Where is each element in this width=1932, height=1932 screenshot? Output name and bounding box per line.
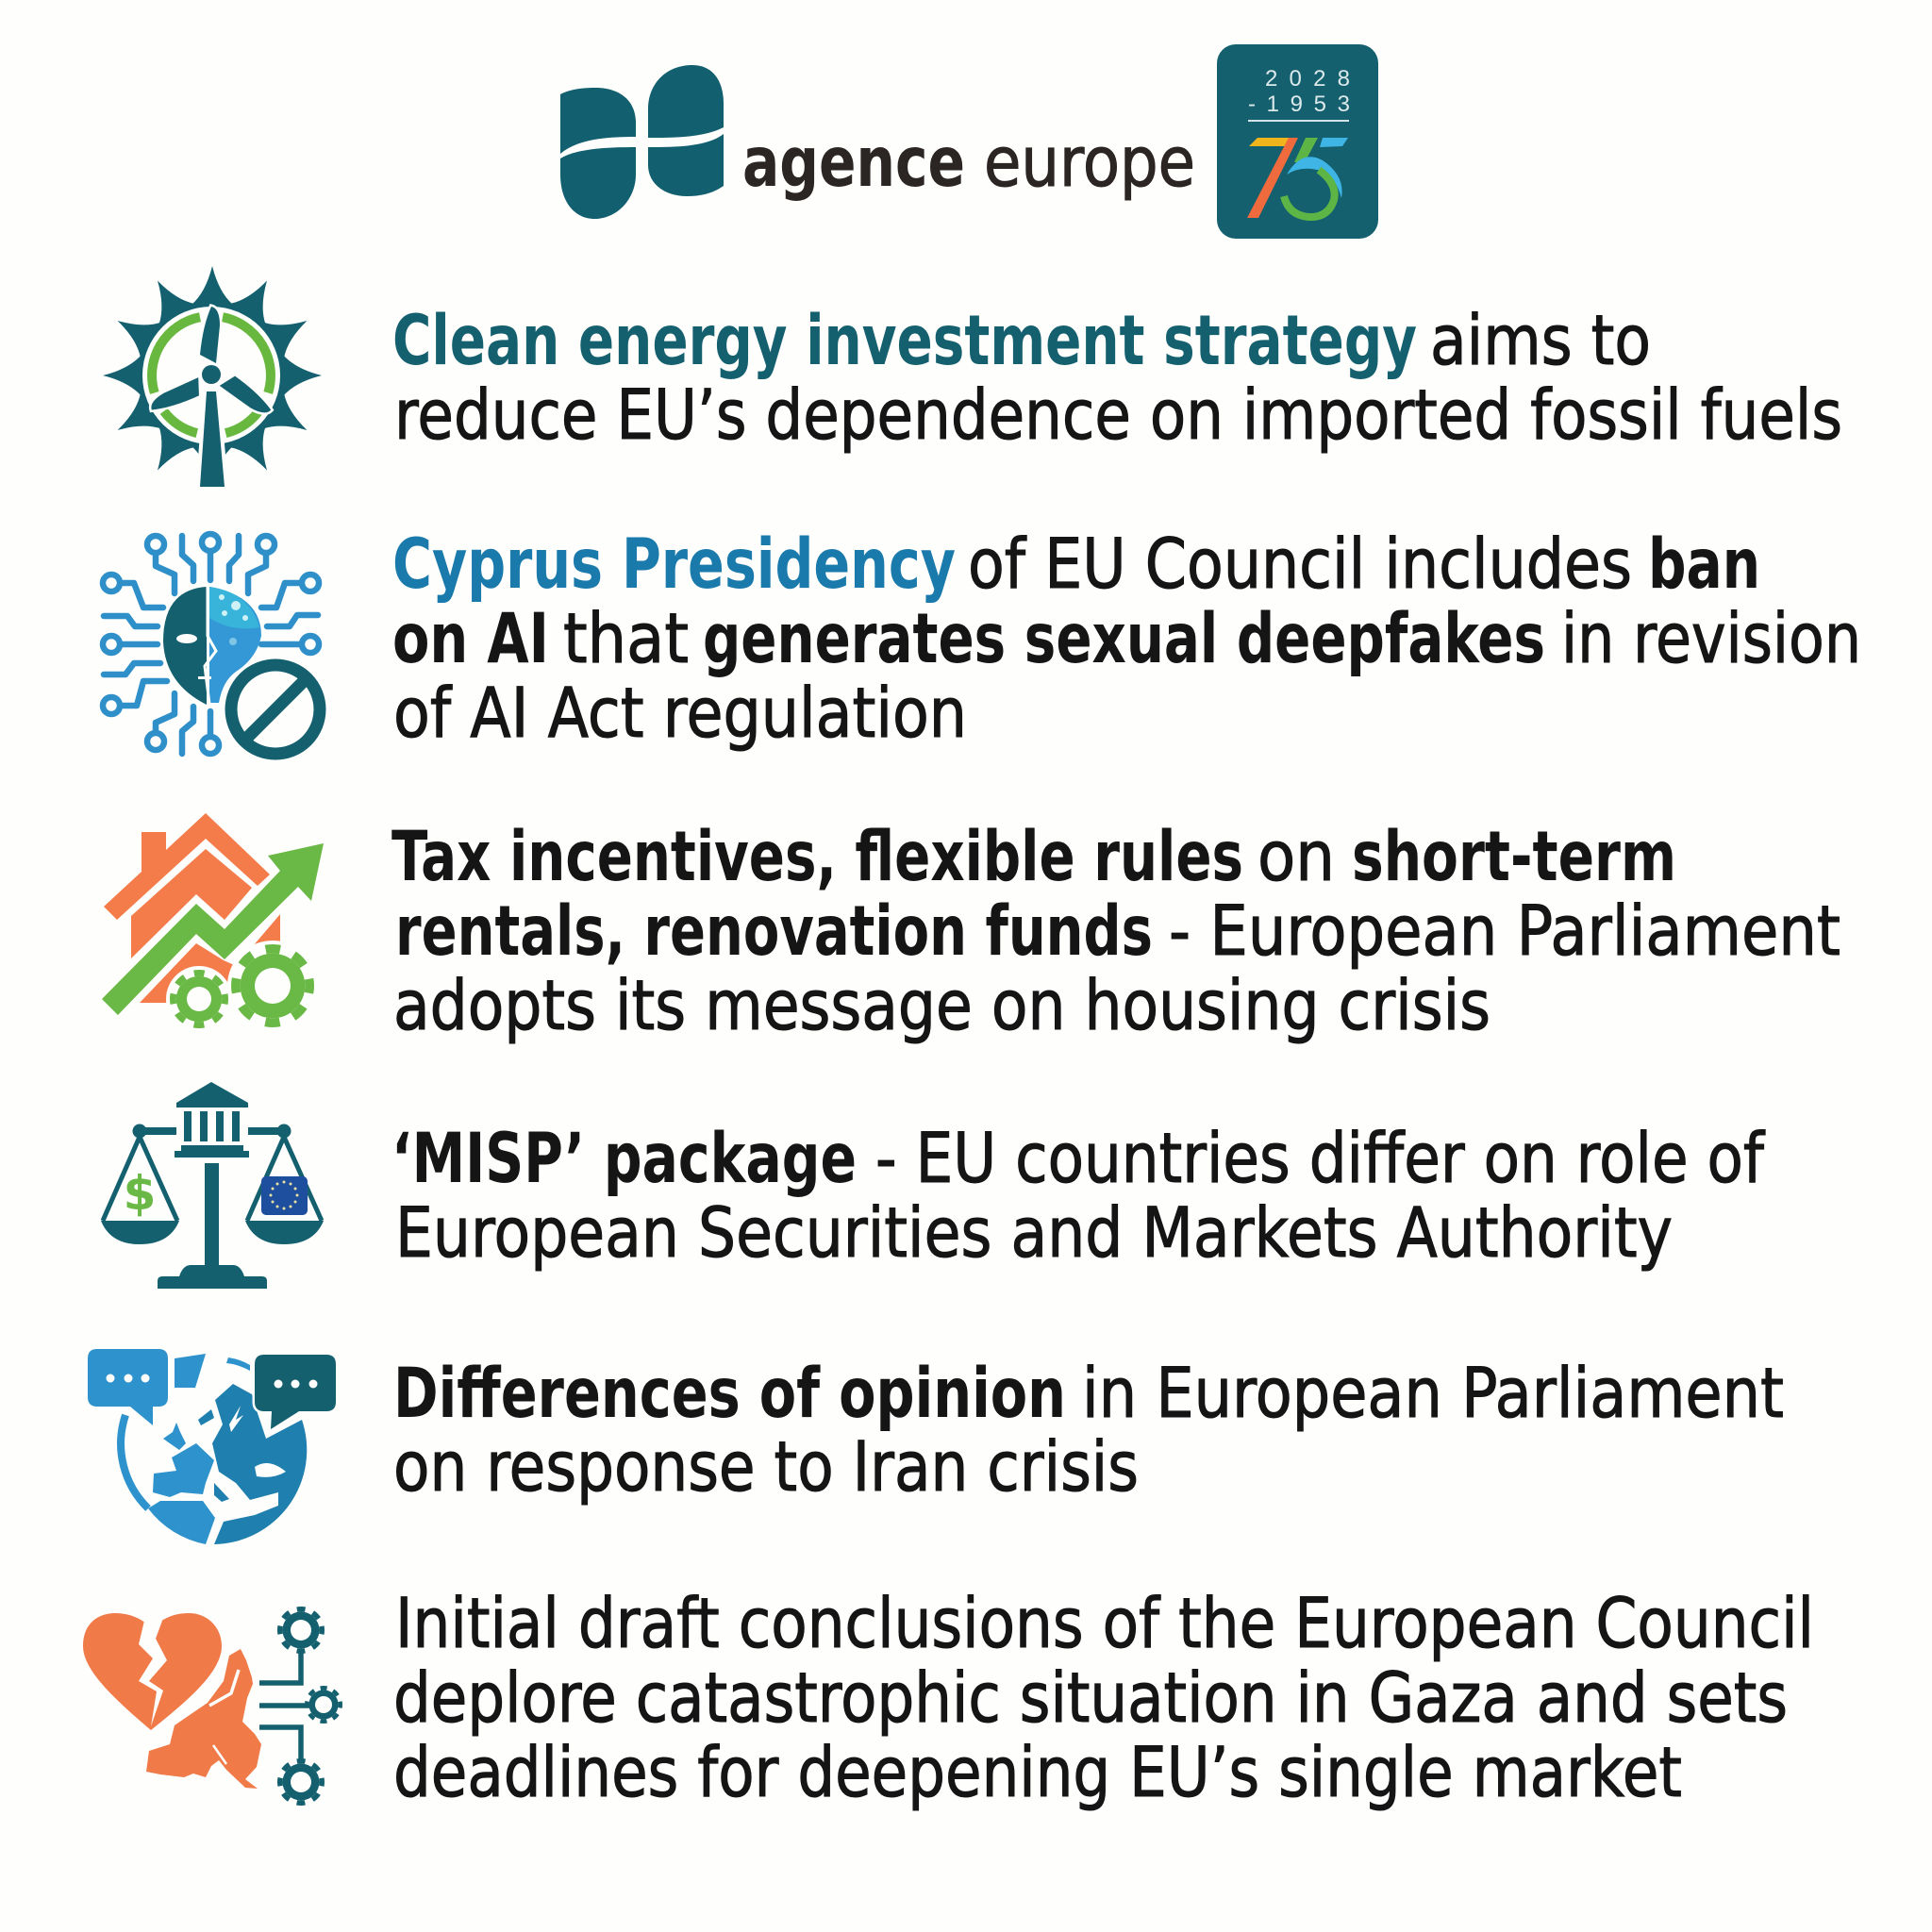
headline 3 — [391, 817, 1840, 1046]
icon: agence europe symbol — [560, 65, 724, 219]
headline 5: on response to Iran crisis — [393, 1427, 1139, 1507]
header: logo and anniversary badge — [560, 44, 1378, 239]
headline 3: rentals, renovation funds — [395, 891, 1153, 972]
headline 1: Clean energy investment strategy — [392, 301, 1417, 381]
headline 5: Differences of opinion — [393, 1354, 1066, 1434]
row 1: clean energy — [103, 266, 1842, 487]
headline 3: Tax incentives, flexible rules — [391, 817, 1243, 897]
brand name — [742, 123, 1195, 203]
headline 2: Cyprus Presidency — [392, 525, 956, 605]
badge: 75 years: -1953 — [1248, 92, 1350, 117]
headline 3: short-term — [1352, 817, 1676, 897]
icon: AI face with circuit traces and ban sign — [103, 534, 326, 760]
row 2: AI deepfakes — [103, 525, 1861, 760]
row 5: Iran crisis — [88, 1349, 1784, 1544]
brand name: agence — [742, 123, 965, 203]
icon: balance scale with institution, dollar and EU flag: $ — [124, 1166, 156, 1221]
brand name: europe — [984, 123, 1195, 203]
headline 2 — [392, 525, 1861, 754]
headline 4: - EU countries differ on role of — [875, 1119, 1766, 1199]
headline 2: on AI — [392, 599, 549, 679]
headline 3: adopts its message on housing crisis — [393, 966, 1491, 1046]
badge: 75 years — [1217, 44, 1378, 239]
headline 1: aims to — [1430, 301, 1651, 381]
headline 2: in revision — [1561, 599, 1861, 679]
badge: 75 years: 2028 — [1265, 66, 1350, 92]
row 4: MISP package — [101, 1082, 1766, 1289]
row 3: housing — [102, 813, 1840, 1046]
icon: split globe with speech bubbles — [88, 1349, 336, 1544]
icon: wind turbine in sun — [103, 266, 322, 487]
headline 2: of AI Act regulation — [393, 674, 967, 754]
row 6: European Council — [83, 1584, 1814, 1813]
headline 3: - European Parliament — [1169, 891, 1840, 972]
headline 6: deadlines for deepening EU’s single market — [393, 1733, 1682, 1813]
headline 3: on — [1257, 817, 1335, 897]
headline 2: that — [563, 599, 689, 679]
headline 6 — [393, 1584, 1814, 1813]
headline 5 — [393, 1354, 1784, 1507]
icon: balance scale with institution, dollar and EU flag — [101, 1082, 324, 1289]
headline 4 — [391, 1119, 1766, 1274]
icon: broken heart, Europe map and market gears — [83, 1609, 341, 1803]
headline 2: of EU Council includes — [968, 525, 1632, 605]
headline 4: European Securities and Markets Authority — [395, 1193, 1673, 1274]
headline 2: ban — [1648, 525, 1760, 605]
headline 2: generates sexual deepfakes — [703, 599, 1545, 679]
icon: house, rising arrow and gears — [102, 813, 324, 1032]
headline 5: in European Parliament — [1082, 1354, 1784, 1434]
headline 1 — [392, 301, 1842, 456]
headline 4: ‘MISP’ package — [391, 1119, 857, 1199]
